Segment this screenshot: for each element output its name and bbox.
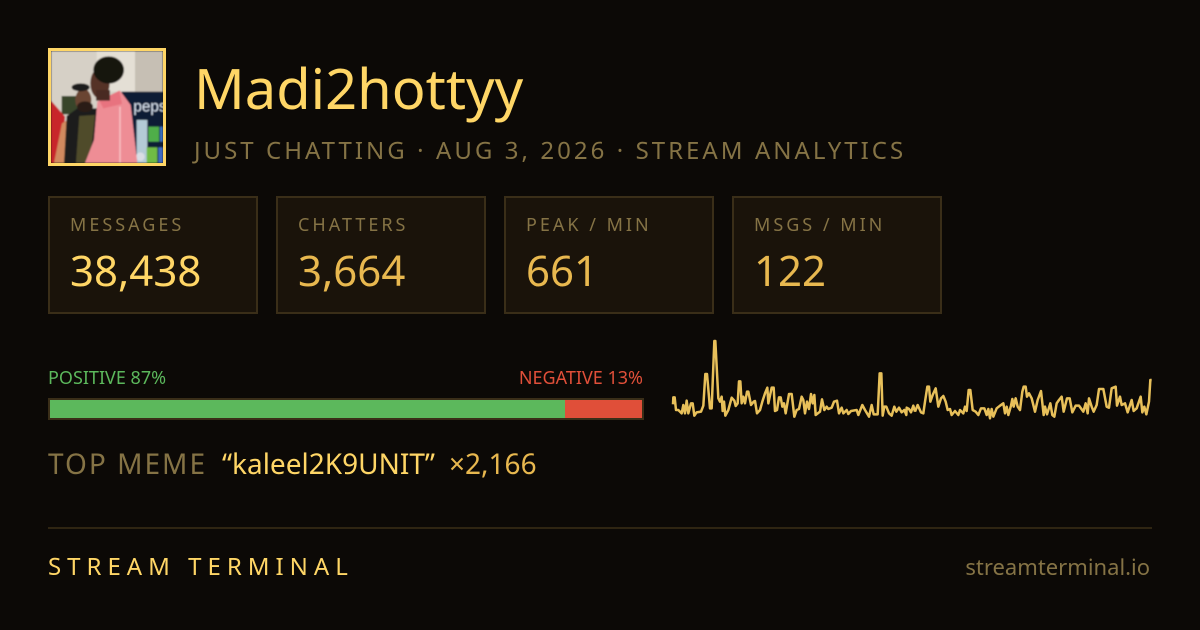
top meme value: “kaleel2K9UNIT”	[222, 445, 435, 483]
footer url: streamterminal.io	[965, 552, 1150, 582]
stat card: messages	[48, 196, 258, 314]
footer divider	[48, 527, 1152, 529]
stat card: peak per minute: 661	[526, 242, 598, 299]
top meme label: TOP MEME	[48, 445, 207, 483]
sentiment bar	[48, 398, 644, 420]
subtitle: JUST CHATTING · AUG 3, 2026 · STREAM ANALYTICS	[194, 134, 906, 167]
stat card: chatters: CHATTERS	[298, 213, 408, 237]
negative sentiment label: NEGATIVE 13%	[519, 366, 643, 390]
stat card: messages: MESSAGES	[70, 213, 184, 237]
stat card: messages per minute: 122	[754, 242, 826, 299]
avatar photo	[48, 48, 166, 166]
footer brand: STREAM TERMINAL	[48, 550, 354, 583]
activity sparkline	[672, 340, 1152, 420]
stat card: chatters	[276, 196, 486, 314]
stat card: messages per minute	[732, 196, 942, 314]
stat card: chatters: 3,664	[298, 242, 405, 299]
stat card: messages: 38,438	[70, 242, 201, 299]
stat card: peak per minute	[504, 196, 714, 314]
stat card: peak per minute: PEAK / MIN	[526, 213, 652, 237]
positive sentiment label: POSITIVE 87%	[48, 366, 166, 390]
top meme count: ×2,166	[449, 445, 537, 483]
stat card: messages per minute: MSGS / MIN	[754, 213, 885, 237]
title: Madi2hottyy	[194, 50, 523, 126]
